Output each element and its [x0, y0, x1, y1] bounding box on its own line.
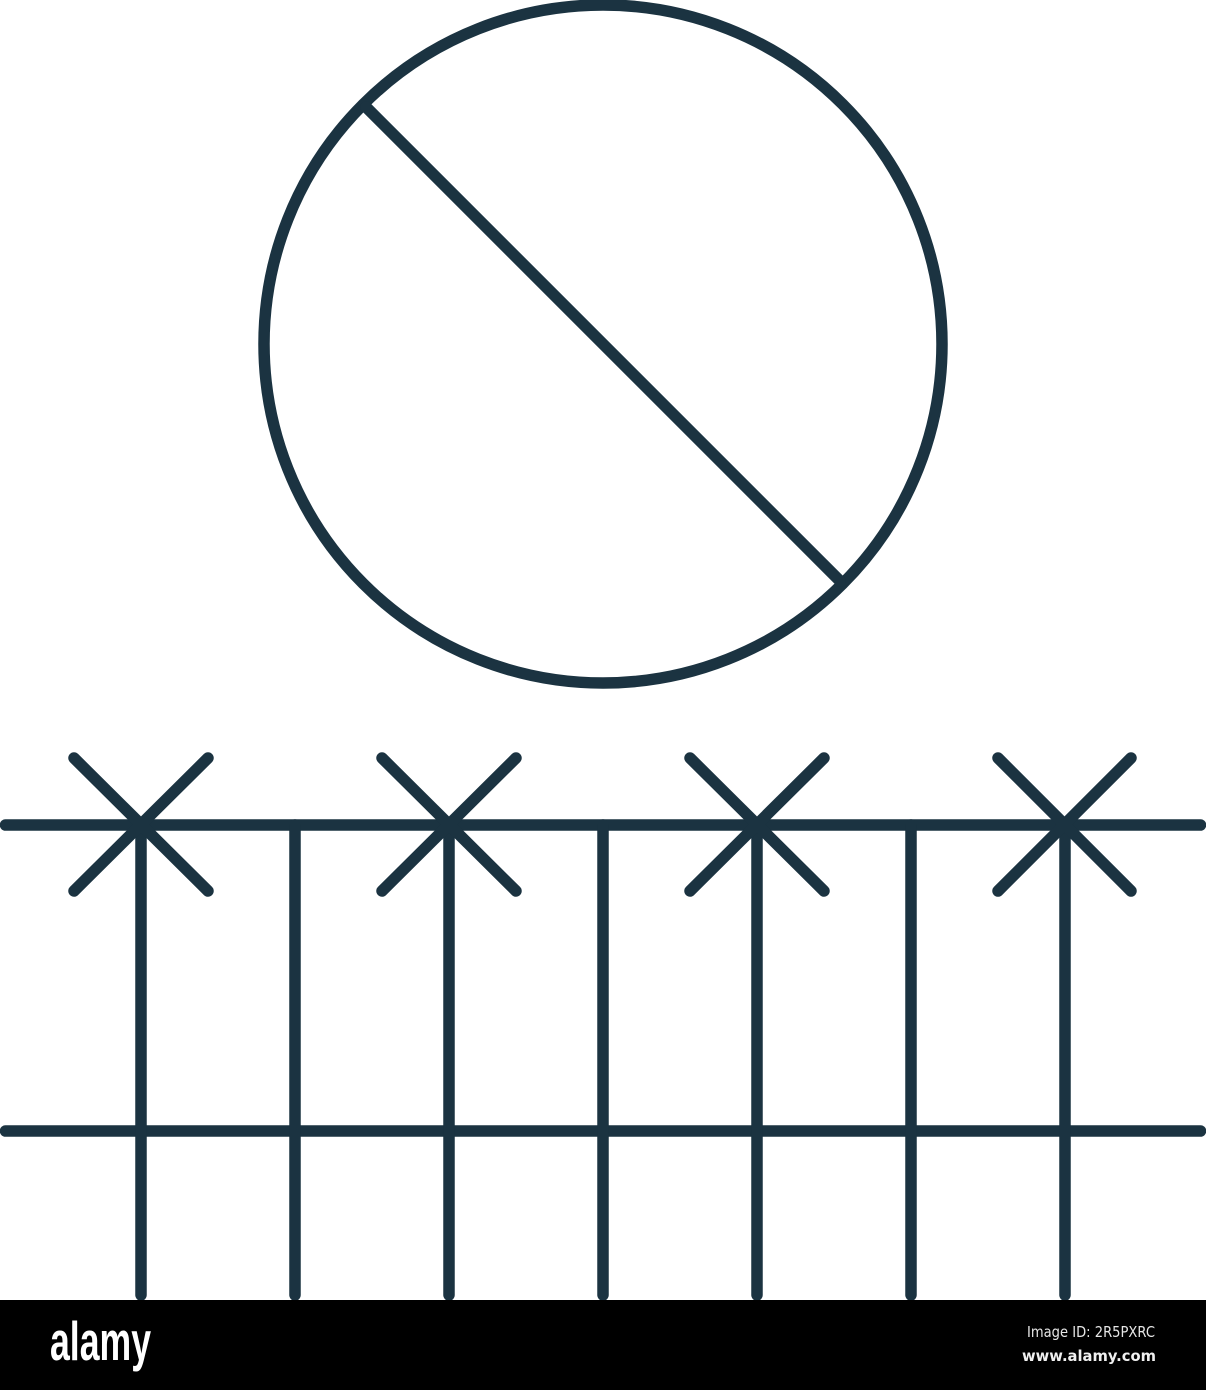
logo text: alamy: [50, 1310, 151, 1372]
footer bar: [0, 1300, 1206, 1390]
image id: Image ID: 2R5PXRC: [1027, 1323, 1155, 1341]
website: www.alamy.com: [1022, 1347, 1156, 1365]
icon: barbed wire fence: [6, 758, 1200, 1295]
icon: prohibition sign: [264, 5, 942, 683]
